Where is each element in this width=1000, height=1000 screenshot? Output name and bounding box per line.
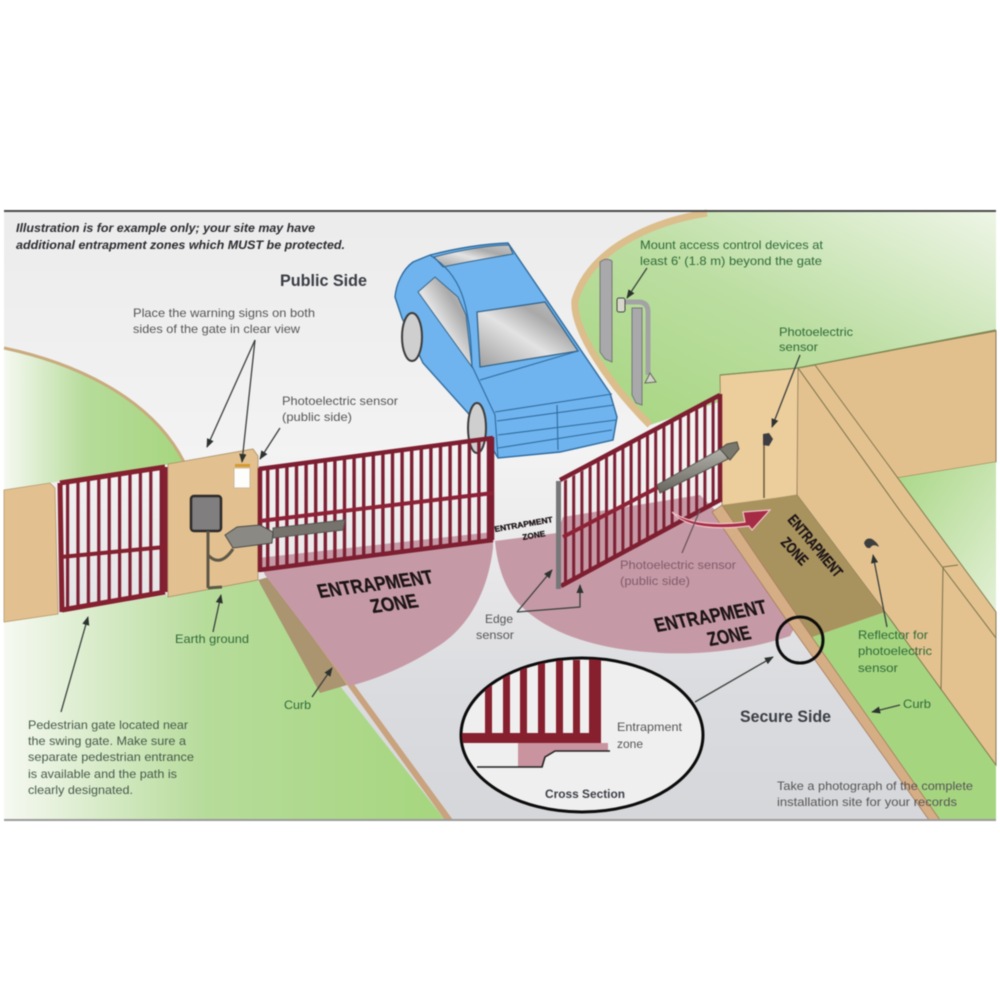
wall top edge — [720, 330, 996, 375]
label: pedestrian gate: the swing gate. Make sure a — [28, 734, 186, 748]
gate operator arm: left — [225, 520, 345, 548]
label: entrapment zone in cross section: Entrapment — [617, 720, 683, 734]
label: photoelectric on zone: Photoelectric sensor — [620, 558, 736, 572]
car body lines — [430, 255, 616, 458]
zone text: left — [315, 567, 436, 618]
cross section callout — [460, 655, 703, 812]
entrapment zone: left gate — [258, 532, 493, 686]
curb: right road edge — [712, 505, 940, 820]
label: photograph note: installation site for your records — [777, 795, 957, 809]
leaf edge sensor — [556, 481, 561, 589]
car body — [395, 243, 617, 458]
cross section pink entrapment — [518, 743, 608, 767]
warning note — [16, 221, 345, 252]
zone text: brown panel: ENTRAPMENT — [784, 512, 846, 581]
gate operator arm: right — [657, 442, 739, 493]
cross section gate rail — [460, 733, 601, 743]
arrow: cross section — [695, 657, 773, 702]
cross section ground line — [477, 751, 610, 767]
warning sign — [234, 464, 250, 488]
arrow: edge sensor — [517, 570, 552, 612]
zone text: right: ZONE — [705, 623, 754, 651]
access device — [617, 298, 625, 312]
side wall cap lines — [798, 368, 996, 690]
car rear wheel — [402, 313, 422, 361]
car — [395, 243, 617, 458]
arrow: pedestrian gate — [61, 617, 88, 712]
label: photoelectric public — [282, 394, 398, 424]
green behind side wall — [897, 462, 996, 612]
label: warning signs: sides of the gate in clear view — [133, 322, 300, 336]
zone text: small far: ZONE — [522, 529, 547, 542]
detail circle — [777, 617, 823, 663]
heading: public side: Public Side — [280, 271, 367, 290]
frame lines — [4, 210, 996, 821]
label: edge sensor — [476, 612, 514, 642]
post 2 with arm — [632, 308, 642, 405]
lawn: upper left — [4, 348, 184, 490]
entrapment zone: right gate — [495, 495, 796, 653]
main pillar — [168, 449, 258, 597]
conduit — [208, 531, 233, 588]
arrow: earth ground — [213, 595, 221, 632]
arrow: photoelectric right — [772, 355, 800, 427]
label: photoelectric right — [779, 325, 853, 354]
label: warning signs — [133, 306, 315, 336]
arrow: warning signs — [207, 340, 255, 447]
zone text: right: ENTRAPMENT — [652, 597, 770, 637]
label: photoelectric right: Photoelectric — [779, 325, 853, 339]
walls: right side — [720, 330, 996, 765]
curb: left road edge — [258, 572, 453, 820]
label: edge sensor: sensor — [476, 628, 514, 642]
zone text: small far — [494, 515, 554, 542]
label: pedestrian gate: clearly designated. — [28, 783, 133, 797]
label: mount access devices — [640, 238, 824, 268]
label: reflector: photoelectric — [858, 644, 932, 658]
entrapment zone: brown panel — [722, 495, 885, 637]
lawn: upper right with curb — [575, 212, 996, 425]
heading: secure side: Secure Side — [740, 707, 831, 726]
gate pillar — [720, 368, 798, 507]
label: reflector — [858, 628, 932, 675]
access control posts — [600, 259, 656, 405]
zone text: brown panel — [777, 512, 846, 581]
post 1 — [600, 259, 612, 362]
zone text: left: ZONE — [368, 591, 421, 618]
arrow: photoelectric public — [260, 428, 280, 459]
zone text: left: ENTRAPMENT — [315, 567, 436, 603]
main gate: public side left leaf — [259, 437, 493, 572]
wall inner back — [797, 331, 996, 478]
label: pedestrian gate: is available and the path is — [28, 767, 177, 781]
zone text: brown panel: ZONE — [777, 534, 811, 569]
car windshield — [477, 302, 578, 367]
cross section gate bars — [485, 655, 601, 735]
label: reflector: Reflector for — [858, 628, 928, 642]
line: mid photoelectric — [682, 510, 700, 553]
zone text: small far: ENTRAPMENT — [494, 515, 554, 534]
label: reflector: sensor — [858, 661, 898, 675]
arrows — [61, 268, 900, 712]
label: cross section: Cross Section — [545, 787, 625, 801]
label: photograph note: Take a photograph of the complete — [777, 779, 973, 793]
photoelectric sensor: right wall — [763, 433, 773, 498]
pedestrian gate — [60, 467, 165, 612]
label: mount access devices: Mount access control devices at — [640, 238, 824, 252]
control box — [191, 496, 233, 588]
label: pedestrian gate: Pedestrian gate located near — [28, 718, 188, 732]
label: warning signs: Place the warning signs on both — [133, 306, 315, 320]
label: curb left: Curb — [284, 698, 311, 712]
pedestrian wall — [4, 483, 58, 622]
warning note: Illustration is for example only; your site may have — [16, 221, 315, 235]
warning note: additional entrapment zones which MUST be protected. — [16, 238, 345, 252]
arrow: reflector — [873, 555, 887, 627]
label: photoelectric on zone: (public side) — [620, 574, 690, 588]
illustration background — [4, 211, 996, 820]
lawn: lower right strip — [810, 612, 996, 820]
side wall face — [797, 365, 996, 765]
label: mount access devices: least 6' (1.8 m) beyond the gate — [640, 254, 822, 268]
label: photoelectric public: Photoelectric sensor — [282, 394, 398, 408]
car front wheel — [468, 403, 486, 453]
car rear window — [434, 245, 513, 267]
label: entrapment zone in cross section — [617, 720, 683, 751]
car side window — [418, 277, 472, 367]
label: entrapment zone in cross section: zone — [617, 737, 643, 751]
arrow: curb left — [312, 668, 332, 697]
label: curb right: Curb — [903, 697, 931, 711]
post footing — [645, 373, 656, 383]
arrow: mount devices — [627, 268, 647, 298]
label: photoelectric right: sensor — [779, 340, 818, 354]
swing direction arrow — [672, 510, 770, 530]
label: pedestrian gate — [28, 718, 194, 797]
lawn: lower left — [4, 580, 445, 820]
label: edge sensor: Edge — [485, 612, 513, 626]
label: photoelectric public: (public side) — [282, 410, 352, 424]
label: photograph note — [777, 779, 973, 809]
main gate: right leaf — [556, 394, 720, 589]
zone text: right — [652, 597, 770, 651]
reflector — [864, 538, 879, 548]
label: pedestrian gate: separate pedestrian entrance — [28, 750, 194, 764]
label: photoelectric on zone — [620, 558, 736, 588]
arrow: curb right — [872, 705, 900, 712]
label: earth ground: Earth ground — [175, 632, 249, 646]
